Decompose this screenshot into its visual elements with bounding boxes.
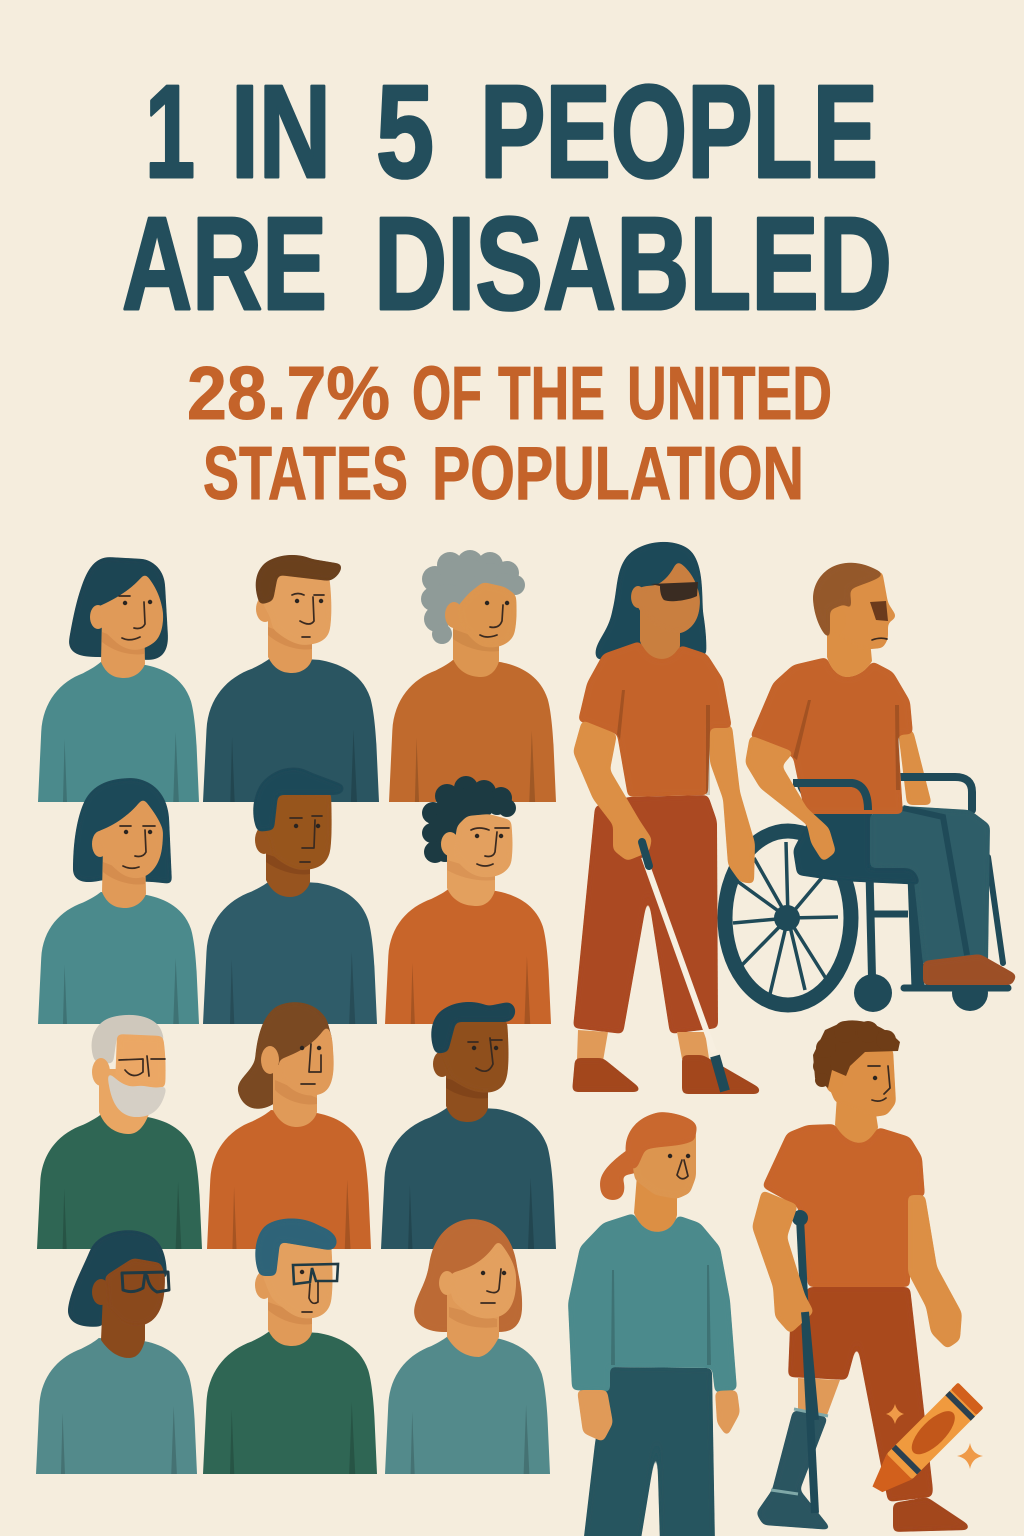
person: man with curly black hair, orange top — [385, 776, 551, 1024]
neck and ear — [631, 586, 680, 660]
icon: sparkles — [886, 1404, 983, 1469]
icon: crayon — [863, 1383, 983, 1503]
face — [826, 1048, 896, 1117]
subtitle: POPULATION — [432, 431, 804, 515]
seated legs — [870, 806, 990, 965]
armrest — [793, 783, 868, 810]
person: woman with auburn hair, teal top — [385, 1219, 550, 1474]
title: 1 — [145, 58, 195, 205]
subtitle: OF — [412, 351, 482, 435]
right arm — [708, 725, 755, 884]
lower leg — [798, 1378, 840, 1415]
right arm — [908, 1195, 962, 1349]
person: man in wheelchair — [725, 563, 1017, 1012]
crutch — [792, 1210, 815, 1513]
eye patch — [870, 601, 888, 621]
shoes — [923, 954, 1017, 985]
subtitle: 28.7% — [187, 351, 390, 435]
long dark hair — [595, 542, 706, 660]
trousers — [583, 1367, 715, 1536]
sunglasses — [650, 582, 698, 601]
person: older man with white hair and beard, green top — [37, 1015, 202, 1249]
left arm — [752, 1190, 814, 1334]
person: woman with glasses, teal top — [36, 1230, 197, 1474]
hands — [577, 1390, 740, 1442]
person: man with dark skin and dark teal hair, dark teal top — [203, 767, 377, 1024]
person: older woman with grey curls, orange top — [389, 550, 556, 802]
face — [630, 1130, 696, 1199]
face — [635, 561, 700, 633]
white cane — [642, 842, 725, 1091]
curly hair — [813, 1020, 900, 1088]
subtitle — [187, 351, 832, 515]
subtitle: THE — [498, 351, 605, 435]
person: man with curly hair, crutch and leg brace — [752, 1020, 969, 1532]
shirt — [762, 1124, 925, 1287]
title: 5 — [376, 58, 434, 205]
far arm — [898, 730, 932, 805]
seat — [782, 760, 920, 885]
subtitle: STATES — [203, 431, 408, 515]
shoe — [893, 1497, 969, 1532]
trousers and shorts — [788, 1287, 933, 1502]
shoes — [572, 1055, 760, 1094]
title: IN — [231, 58, 331, 205]
person: woman with long hair, sunglasses and white cane — [572, 542, 760, 1094]
arm — [745, 735, 836, 862]
trousers — [573, 795, 718, 1034]
person: woman with long brown hair, orange top — [207, 1002, 371, 1249]
face — [826, 570, 897, 650]
wheelchair — [725, 777, 1008, 1012]
neck — [634, 1175, 677, 1232]
person: woman with dark bob, teal top — [38, 557, 199, 802]
ponytail — [600, 1145, 640, 1200]
person: man with dark skin and swept hair, dark teal top — [381, 1002, 556, 1249]
person: man with blue hair and glasses, green top — [203, 1218, 377, 1474]
shirt — [750, 657, 913, 814]
neck — [827, 625, 872, 677]
lower legs — [577, 1030, 710, 1065]
title — [122, 58, 892, 337]
title: PEOPLE — [480, 58, 878, 205]
person: woman with dark teal bob, teal top — [38, 778, 199, 1024]
hair — [813, 563, 884, 640]
left arm — [573, 720, 652, 861]
title: ARE — [122, 190, 327, 337]
shirt — [578, 641, 732, 797]
subtitle: UNITED — [627, 351, 832, 435]
person: man with brown hair, dark teal top — [203, 555, 379, 802]
leg brace — [756, 1410, 832, 1530]
neck — [835, 1095, 878, 1143]
hair — [625, 1112, 697, 1170]
sweater — [568, 1213, 737, 1393]
person: woman with red ponytail, teal sweater — [568, 1112, 740, 1536]
